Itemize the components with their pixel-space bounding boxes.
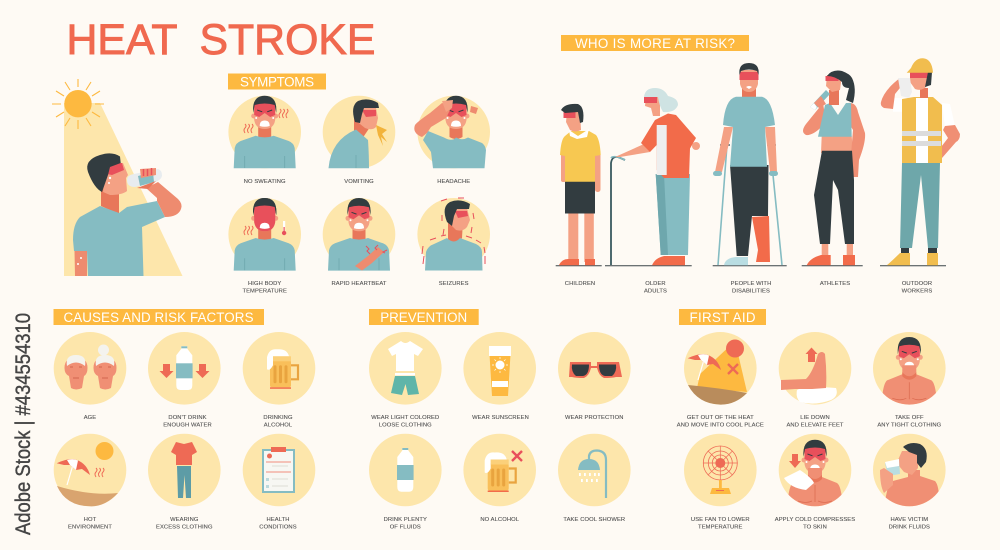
symptom: vomiting: VOMITING xyxy=(344,179,374,185)
symptom: seizures: SEIZURES xyxy=(439,281,469,287)
symptom: seizures xyxy=(417,198,490,287)
heading: prevention: PREVENTION xyxy=(380,310,467,325)
symptom: no sweating xyxy=(228,96,301,185)
prevention: cool shower xyxy=(558,434,631,523)
cause: hot environment: ENVIRONMENT xyxy=(68,524,112,530)
illustration: man drinking under sun xyxy=(52,79,182,276)
cause: health conditions: CONDITIONS xyxy=(259,524,297,530)
prevention: cool shower: TAKE COOL SHOWER xyxy=(563,517,625,523)
symptom: rapid heartbeat: RAPID HEARTBEAT xyxy=(331,281,387,287)
heading: first aid: FIRST AID xyxy=(690,310,756,325)
first aid: drink fluids xyxy=(873,434,946,530)
figure: people with disabilities: DISABILITIES xyxy=(732,288,770,294)
first aid: drink fluids: DRINK FLUIDS xyxy=(889,524,930,530)
figure: outdoor workers xyxy=(881,58,960,294)
prevention: sunglasses: WEAR PROTECTION xyxy=(565,415,624,421)
cause: drinking alcohol xyxy=(243,332,315,428)
prevention: drink plenty of fluids: DRINK PLENTY xyxy=(384,517,427,523)
figure: outdoor workers: WORKERS xyxy=(902,288,932,294)
cause: age xyxy=(54,332,126,421)
stock id text: Adobe Stock | #434554310 xyxy=(12,313,35,535)
heading: causes and risk factors: CAUSES AND RISK FACTORS xyxy=(64,310,254,325)
cause: don't drink enough water xyxy=(148,332,221,428)
cause: don't drink enough water: DON'T DRINK xyxy=(168,415,207,421)
prevention: drink plenty of fluids xyxy=(369,434,442,530)
cause: drinking alcohol: DRINKING xyxy=(263,415,293,421)
first aid: lie down and elevate feet xyxy=(779,332,851,428)
figure: people with disabilities: PEOPLE WITH xyxy=(731,281,771,287)
prevention: sunglasses xyxy=(558,332,631,421)
first aid: use fan: TEMPERATURE xyxy=(698,524,743,530)
prevention: light loose clothing xyxy=(369,332,442,428)
prevention: sunscreen xyxy=(463,332,536,421)
cause: drinking alcohol: ALCOHOL xyxy=(264,422,293,428)
cause: hot environment: HOT xyxy=(84,517,97,523)
cause: don't drink enough water: ENOUGH WATER xyxy=(163,422,212,428)
prevention: light loose clothing: WEAR LIGHT COLORED xyxy=(371,415,439,421)
cause: wearing excess clothing: WEARING xyxy=(170,517,199,523)
cause: health conditions: HEALTH xyxy=(266,517,290,523)
figure: older adults xyxy=(611,88,700,294)
prevention: no alcohol: NO ALCOHOL xyxy=(480,517,520,523)
heading: symptoms: SYMPTOMS xyxy=(240,74,314,90)
symptom: high body temperature: TEMPERATURE xyxy=(242,288,287,294)
cause: wearing excess clothing: EXCESS CLOTHING xyxy=(156,524,213,530)
symptom: vomiting xyxy=(323,96,395,185)
figure: children: CHILDREN xyxy=(565,281,595,287)
first aid: use fan: USE FAN TO LOWER xyxy=(691,517,750,523)
panel: prevention xyxy=(369,309,631,530)
heading: who is more at risk: WHO IS MORE AT RISK? xyxy=(575,36,735,51)
symptom: high body temperature: HIGH BODY xyxy=(248,281,281,287)
man figure xyxy=(73,153,182,276)
first aid: get out of the heat: AND MOVE INTO COOL PLACE xyxy=(677,422,764,428)
first aid: cold compresses xyxy=(775,434,855,530)
title: HEAT xyxy=(66,16,177,64)
prevention: sunscreen: WEAR SUNSCREEN xyxy=(472,415,529,421)
first aid: get out of the heat: GET OUT OF THE HEAT xyxy=(687,415,754,421)
first aid: use fan xyxy=(684,434,757,530)
sun light beam xyxy=(64,103,182,276)
symptom: no sweating: NO SWEATING xyxy=(244,179,286,185)
title: STROKE xyxy=(200,16,375,64)
figure: athletes xyxy=(803,71,865,287)
first aid: get out of the heat xyxy=(677,332,764,428)
first aid: take off tight clothing xyxy=(873,332,946,428)
figure: athletes: ATHLETES xyxy=(820,281,850,287)
prevention: no alcohol xyxy=(463,434,536,523)
symptom: rapid heartbeat xyxy=(323,198,395,287)
first aid: take off tight clothing: ANY TIGHT CLOTHING xyxy=(877,422,942,428)
figure: older adults: ADULTS xyxy=(644,288,667,294)
cause: hot environment xyxy=(54,434,126,530)
ground lines xyxy=(556,265,946,267)
symptom: headache: HEADACHE xyxy=(437,179,470,185)
first aid: lie down and elevate feet: AND ELEVATE FEET xyxy=(786,422,844,428)
cause: wearing excess clothing xyxy=(148,434,221,530)
panel: causes and risk factors xyxy=(54,309,315,530)
panel: who is more at risk xyxy=(556,35,960,294)
prevention: light loose clothing: LOOSE CLOTHING xyxy=(379,422,432,428)
cause: health conditions xyxy=(243,434,315,530)
first aid: take off tight clothing: TAKE OFF xyxy=(895,415,924,421)
figure: outdoor workers: OUTDOOR xyxy=(902,281,932,287)
panel: symptoms xyxy=(228,74,490,294)
first aid: drink fluids: HAVE VICTIM xyxy=(890,517,928,523)
panel: first aid xyxy=(677,309,946,530)
figure: children xyxy=(559,104,601,287)
icon: sun xyxy=(52,79,104,129)
cause: age: AGE xyxy=(84,415,96,421)
prevention: drink plenty of fluids: OF FLUIDS xyxy=(390,524,421,530)
symptom: high body temperature xyxy=(228,198,301,294)
first aid: lie down and elevate feet: LIE DOWN xyxy=(800,415,830,421)
first aid: cold compresses: TO SKIN xyxy=(803,524,827,530)
first aid: cold compresses: APPLY COLD COMPRESSES xyxy=(775,517,855,523)
figure: people with disabilities xyxy=(713,63,782,294)
symptom: headache xyxy=(414,96,490,185)
figure: older adults: OLDER xyxy=(645,281,666,287)
